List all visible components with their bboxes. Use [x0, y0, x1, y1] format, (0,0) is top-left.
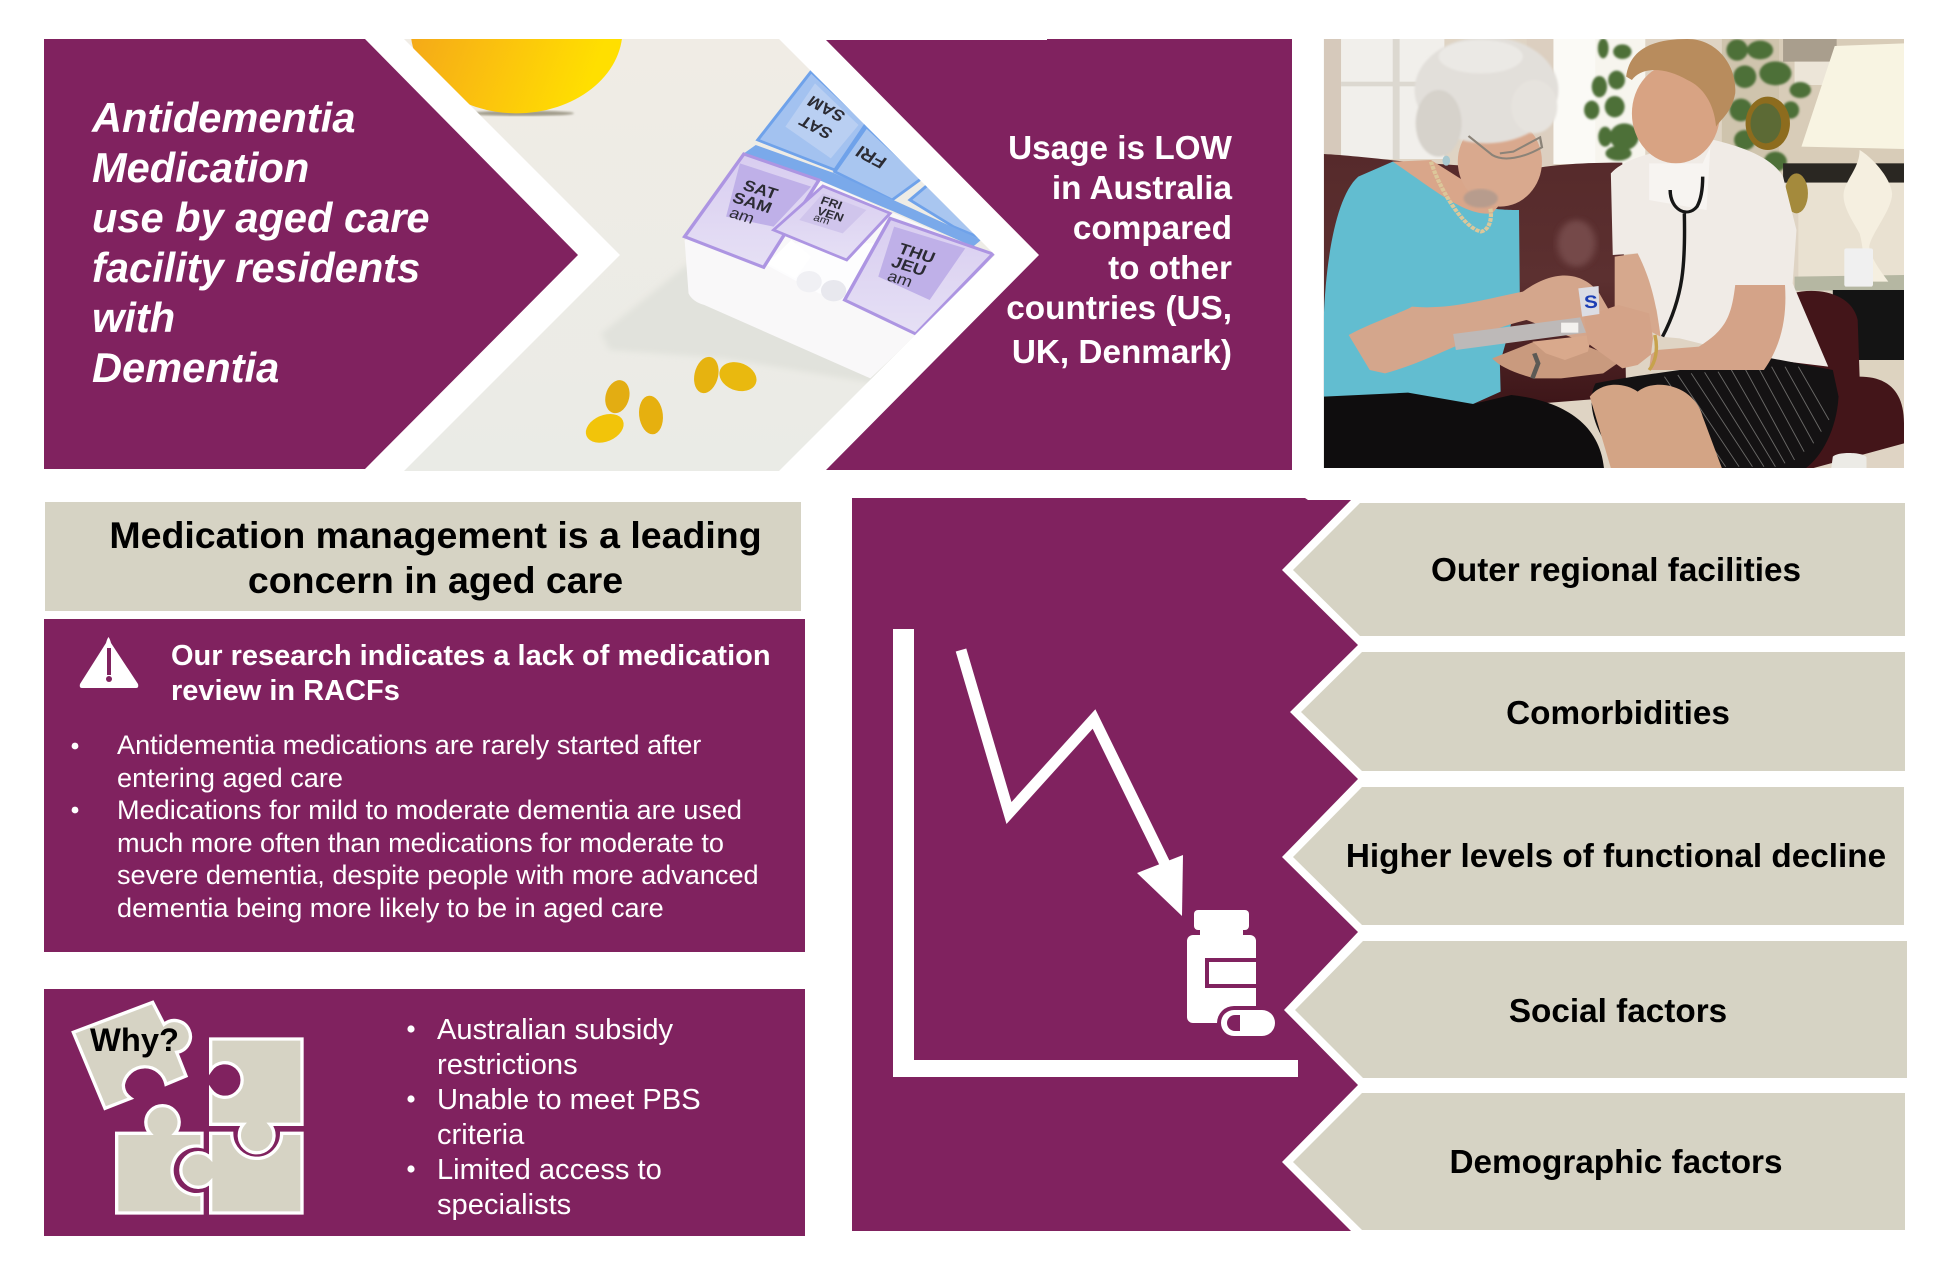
photo: pill organiser and capsules: JEU — [889, 253, 929, 280]
research bullet list — [72, 729, 759, 923]
chevron: comorbidities: Comorbidities — [1506, 695, 1730, 732]
chevron: higher levels of functional decline — [1293, 787, 1904, 925]
icon: warning triangle — [80, 637, 138, 688]
photo: pill organiser and capsules — [404, 39, 995, 471]
title text: with — [92, 294, 175, 341]
research bullet list: severe dementia, despite people with more advanced — [117, 859, 759, 890]
photo: pill organiser and capsules: VEN — [815, 205, 846, 225]
chevron: demographic factors: Demographic factors — [1449, 1144, 1783, 1181]
usage text: compared — [1073, 210, 1232, 247]
usage text: Usage is LOW — [1008, 130, 1233, 167]
why bullet list: Limited access to — [437, 1154, 662, 1186]
photo: pill organiser and capsules: FRI — [819, 194, 844, 212]
why bullet list: restrictions — [437, 1049, 578, 1081]
icon: jigsaw puzzle — [73, 1002, 302, 1213]
photo: pill organiser and capsules: am — [812, 212, 831, 227]
heading: medication management: Medication management is a leading — [109, 514, 762, 556]
panel: research findings — [44, 619, 805, 952]
chevron: demographic factors — [1293, 1093, 1905, 1230]
photo: pill organiser and capsules: SAT — [795, 112, 836, 142]
photo: pill organiser and capsules: am — [727, 204, 757, 227]
chart axes — [893, 629, 1298, 1077]
photo: pill organiser and capsules: SAM — [730, 189, 775, 217]
photo: pill organiser and capsules: SAM — [804, 92, 849, 125]
research bullet list: Medications for mild to moderate dementia are used — [117, 794, 742, 825]
title panel — [44, 39, 578, 469]
research heading — [171, 640, 771, 707]
research bullet list: dementia being more likely to be in aged care — [117, 892, 664, 923]
photo: nurse helping older woman with pill box — [1324, 37, 1904, 468]
photo: pill organiser and capsules: SAT — [740, 176, 781, 203]
panel: declining usage chart — [852, 498, 1358, 1231]
why bullet list: specialists — [437, 1189, 571, 1221]
icon: medicine bottle and pill — [1187, 910, 1279, 1040]
photo: nurse helping older woman with pill box: S — [1584, 292, 1598, 313]
photo: pill organiser and capsules: am — [885, 267, 915, 291]
heading: medication management — [45, 502, 801, 611]
research bullet list: entering aged care — [117, 762, 343, 793]
why bullet list: Unable to meet PBS — [437, 1084, 701, 1116]
research bullet list: much more often than medications for moderate to — [117, 827, 724, 858]
title text: Medication — [92, 144, 309, 191]
heading: medication management: concern in aged care — [248, 559, 623, 601]
usage text: in Australia — [1052, 170, 1232, 207]
usage text: to other — [1108, 250, 1232, 287]
plant leaves — [1584, 38, 1811, 172]
title text: facility residents — [92, 244, 420, 291]
photo: pill organiser and capsules: THU — [896, 240, 938, 267]
usage text: countries (US, — [1006, 290, 1232, 327]
title text — [91, 94, 430, 391]
research heading: Our research indicates a lack of medication — [171, 640, 771, 672]
chevron: outer regional facilities — [1293, 503, 1905, 636]
title text: Dementia — [92, 344, 279, 391]
title text: Antidementia — [91, 94, 355, 141]
usage text: UK, Denmark) — [1012, 334, 1232, 371]
research bullet list: Antidementia medications are rarely started after — [117, 729, 701, 760]
why bullet list: criteria — [437, 1119, 525, 1151]
arrow: downward trend — [961, 650, 1183, 916]
chevron: comorbidities — [1301, 652, 1905, 771]
research heading: review in RACFs — [171, 675, 400, 707]
panel: why — [44, 989, 805, 1236]
why label: Why? — [90, 1021, 179, 1058]
why bullet list — [407, 1014, 701, 1221]
chevron: higher levels of functional decline: Higher levels of functional decline — [1346, 838, 1886, 875]
chevron: outer regional facilities: Outer regional facilities — [1431, 552, 1801, 589]
title text: use by aged care — [92, 194, 430, 241]
panel: usage comparison — [826, 39, 1292, 470]
usage text — [1006, 130, 1233, 371]
photo: pill organiser and capsules: FRI — [851, 142, 890, 172]
chevron: social factors: Social factors — [1509, 993, 1727, 1030]
why bullet list: Australian subsidy — [437, 1014, 674, 1046]
chevron: social factors — [1295, 941, 1907, 1078]
